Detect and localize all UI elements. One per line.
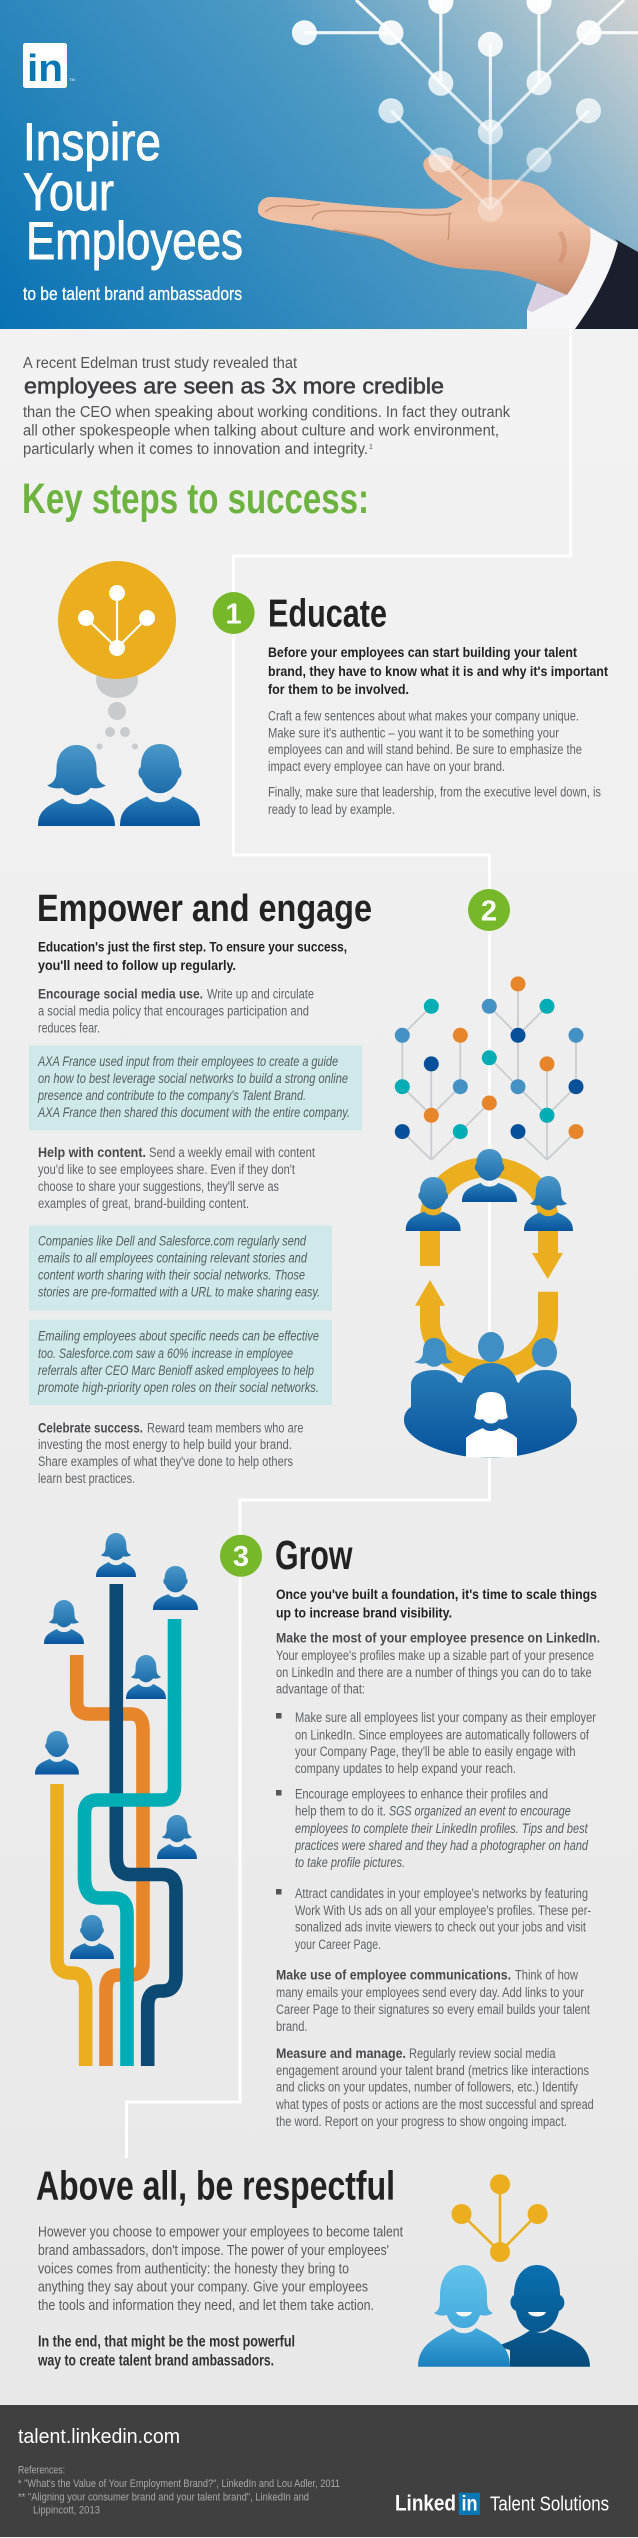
intro text: all other spokespeople when talking about culture and work environment, (23, 422, 499, 440)
measure and manage (275, 2045, 594, 2129)
callout: Salesforce referrals: referrals after CEO Marc Benioff asked employees to help (38, 1363, 314, 1378)
measure and manage: Measure and manage. (276, 2045, 406, 2061)
closing paragraph (38, 2224, 404, 2314)
icon: interweaving career paths (57, 1584, 176, 2066)
icon: thought bubble with two employees (38, 561, 200, 826)
LinkedIn Talent Solutions logo (395, 2491, 609, 2516)
icon: two smiling employees with idea network (418, 2174, 590, 2367)
help with content (38, 1144, 315, 1211)
heading: above all, be respectful: Above all, be respectful (36, 2162, 395, 2208)
LinkedIn Talent Solutions logo: in (462, 2493, 478, 2516)
closing paragraph: anything they say about your company. Give your employees (38, 2279, 368, 2296)
help with content: you'd like to see employees share. Even if they don't (38, 1162, 295, 1177)
closing statement: In the end, that might be the most powerful (38, 2334, 295, 2351)
LinkedIn Talent Solutions logo: Linked (395, 2491, 456, 2516)
icon: feedback loop arrows (415, 1167, 563, 1370)
step 2 badge: 2 (481, 896, 497, 928)
illustration: suit sleeve (575, 239, 638, 329)
encourage social media use: reduces fear. (38, 1020, 100, 1035)
step 1 badge: 1 (226, 598, 242, 630)
callout: Dell and Salesforce: emails to all employees containing relevant stories and (38, 1251, 307, 1266)
callout: AXA France: AXA France used input from their employees to create a guide (37, 1054, 338, 1069)
intro text: particularly when it comes to innovation and integrity. (23, 441, 368, 458)
bullet list: Encourage employees to enhance their profiles and (295, 1787, 548, 1802)
LinkedIn Talent Solutions logo: Talent Solutions (490, 2494, 609, 2516)
intro text: A recent Edelman trust study revealed that (23, 355, 298, 372)
footer url: talent.linkedin.com (18, 2426, 180, 2448)
heading: key steps: Key steps to success: (22, 475, 369, 523)
measure and manage: Regularly review social media (409, 2046, 556, 2061)
LinkedIn logo: TM (69, 77, 75, 82)
closing statement (37, 2334, 295, 2369)
references: Lippincott, 2013 (33, 2504, 100, 2516)
measure and manage: the word. Report on your progress to show ongoing impact. (276, 2114, 567, 2129)
title (23, 113, 243, 271)
subtitle: to be talent brand ambassadors (23, 284, 242, 304)
references: * "What's the Value of Your Employment Brand?", LinkedIn and Lou Adler, 2011 (18, 2478, 340, 2490)
make use of employee communications: brand. (276, 2019, 308, 2034)
educate intro: for them to be involved. (268, 681, 409, 697)
bullet list: your Career Page. (295, 1937, 381, 1952)
icon: network trees (395, 976, 584, 1160)
illustration: open hand (258, 155, 591, 312)
callout: AXA France: on how to best leverage social networks to build a strong online (38, 1071, 348, 1086)
callout: Dell and Salesforce: Companies like Dell and Salesforce.com regularly send (38, 1234, 306, 1248)
grow intro: up to increase brand visibility. (276, 1604, 452, 1620)
callout: Salesforce referrals: too. Salesforce.com saw a 60% increase in employee (38, 1346, 293, 1361)
illustration: shirt cuff (527, 226, 618, 329)
help with content: examples of great, brand-building content. (38, 1196, 249, 1211)
bullet list: your Company Page, they'll be able to easily engage with (295, 1744, 576, 1759)
illustration: network tree (292, 0, 638, 222)
bullet list: help them to do it. (295, 1804, 386, 1819)
bullet list: to take profile pictures. (295, 1855, 405, 1870)
bullet list: SGS organized an event to encourage (389, 1804, 571, 1819)
references: References: (18, 2464, 65, 2476)
closing paragraph: However you choose to empower your employees to become talent (38, 2224, 404, 2241)
make use of employee communications (276, 1966, 590, 2034)
references (18, 2464, 340, 2516)
step 2 badge (468, 889, 510, 931)
intro text: 1 (369, 444, 373, 451)
LinkedIn logo: in (27, 48, 63, 90)
empower intro: you'll need to follow up regularly. (38, 957, 236, 973)
educate body: impact every employee can have on your brand. (268, 759, 505, 774)
callout: AXA France: AXA France then shared this document with the entire company. (37, 1105, 350, 1120)
make the most of your presence: Make the most of your employee presence on LinkedIn. (276, 1630, 600, 1646)
callout: AXA France (29, 1046, 362, 1130)
callout: Dell and Salesforce (29, 1226, 332, 1311)
educate body: Make sure it's authentic – you want it to be something your (268, 725, 559, 740)
title: Your (23, 163, 114, 222)
bullet list (276, 1710, 596, 1952)
empower intro (38, 939, 347, 973)
step 3 badge: 3 (233, 1541, 249, 1573)
step 1 badge (213, 592, 255, 634)
step 3 badge (220, 1535, 262, 1577)
make use of employee communications: Make use of employee communications. (276, 1966, 511, 1982)
measure and manage: and clicks on your updates, number of followers, etc.) Identify (276, 2080, 578, 2095)
closing paragraph: voices comes from authenticity: the honesty they bring to (38, 2260, 349, 2277)
grow intro (276, 1586, 597, 1620)
make the most of your presence: advantage of that: (276, 1682, 365, 1697)
footer (0, 2405, 638, 2537)
connecting white path (126, 329, 570, 2158)
encourage social media use (38, 986, 314, 1035)
closing paragraph: brand ambassadors, don't impose. The power of your employees' (38, 2242, 389, 2259)
intro text: employees are seen as 3x more credible (24, 374, 444, 398)
closing paragraph: the tools and information they need, and let them take action. (38, 2297, 374, 2314)
educate intro (268, 644, 608, 697)
title: Employees (26, 212, 243, 271)
help with content: choose to share your suggestions, they'll serve as (38, 1179, 279, 1194)
callout: AXA France: presence and contribute to the company's Talent Brand. (37, 1088, 306, 1103)
celebrate success (38, 1419, 304, 1486)
encourage social media use: Write up and circulate (207, 987, 314, 1002)
intro text (23, 355, 510, 458)
bullet list: company updates to help expand your reach. (295, 1761, 516, 1776)
celebrate success: investing the most energy to help build your brand. (38, 1437, 292, 1452)
callout: Salesforce referrals: promote high-priority open roles on their social networks. (37, 1380, 319, 1395)
celebrate success: Share examples of what they've done to help others (38, 1454, 293, 1469)
celebrate success: learn best practices. (38, 1471, 135, 1486)
educate body (268, 708, 601, 817)
header banner (0, 0, 638, 329)
icon: employees around paths (35, 1533, 198, 1959)
help with content: Send a weekly email with content (149, 1145, 315, 1160)
educate body: Craft a few sentences about what makes your company unique. (268, 708, 579, 724)
callout: Dell and Salesforce: content worth sharing with their social networks. Those (38, 1267, 305, 1282)
educate body: ready to lead by example. (268, 802, 395, 817)
celebrate success: Celebrate success. (38, 1419, 143, 1435)
help with content: Help with content. (38, 1144, 146, 1160)
empower intro: Education's just the first step. To ensure your success, (38, 939, 347, 955)
encourage social media use: Encourage social media use. (38, 986, 203, 1002)
heading: grow: Grow (275, 1532, 353, 1578)
references: ** "Aligning your consumer brand and your talent brand", LinkedIn and (18, 2492, 309, 2504)
closing statement: way to create talent brand ambassadors. (37, 2352, 274, 2369)
educate intro: Before your employees can start building your talent (268, 644, 577, 660)
encourage social media use: a social media policy that encourages participation and (38, 1004, 309, 1019)
callout: Salesforce referrals (29, 1320, 332, 1405)
educate body: employees can and will stand behind. Be sure to emphasize the (268, 742, 582, 757)
make use of employee communications: Think of how (515, 1967, 578, 1982)
title: Inspire (23, 113, 161, 172)
LinkedIn logo (23, 43, 75, 90)
grow intro: Once you've built a foundation, it's time to scale things (276, 1586, 597, 1602)
heading: educate: Educate (268, 592, 387, 636)
heading: empower and engage: Empower and engage (37, 888, 372, 930)
make the most of your presence (276, 1630, 600, 1697)
icon: top team of three (406, 1149, 573, 1231)
callout: Salesforce referrals: Emailing employees about specific needs can be effective (38, 1329, 319, 1344)
callout: Dell and Salesforce: stories are pre-formatted with a URL to make sharing easy. (38, 1284, 320, 1300)
celebrate success: Reward team members who are (147, 1420, 304, 1435)
intro text: than the CEO when speaking about working conditions. In fact they outrank (23, 404, 510, 421)
icon: bottom team group (404, 1332, 577, 1458)
